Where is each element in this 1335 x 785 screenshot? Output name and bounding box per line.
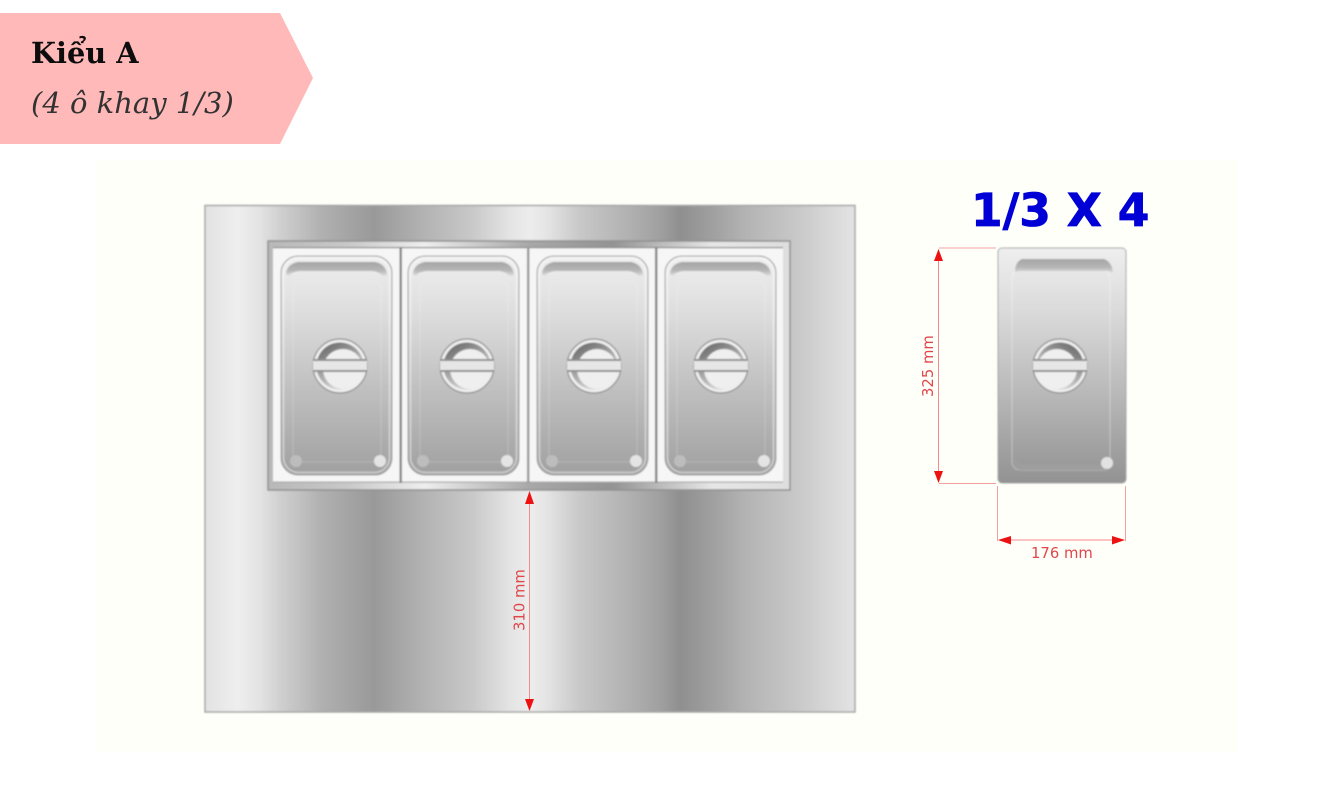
heading: Kiểu A: Kiểu A: [31, 36, 139, 70]
dimension arrow: 310 mm: [512, 491, 534, 711]
dimension label: 176 mm: 176 mm: [1031, 545, 1093, 562]
tray frame: [268, 241, 790, 490]
dimension arrow: 325 mm: [920, 248, 996, 484]
label tag: Kiểu A: [0, 13, 313, 144]
dimension label: 325 mm: 325 mm: [920, 335, 937, 397]
tray lid 4: [665, 256, 776, 475]
tray lid 3: [537, 256, 648, 475]
dimension label: 310 mm: 310 mm: [512, 569, 528, 631]
title: 1/3 X 4: 1/3 X 4: [971, 184, 1149, 237]
tray lid 1: [281, 256, 392, 475]
drawing background panel: [97, 160, 1238, 752]
tray lid 2: [408, 256, 519, 475]
subheading: 4 tray slots: (4 ô khay 1/3): [31, 86, 234, 120]
dimension arrow: 176 mm: [998, 486, 1126, 562]
steel counter with four trays: [205, 206, 855, 712]
single tray lid: [998, 248, 1126, 483]
steel counter surface: [205, 206, 855, 712]
